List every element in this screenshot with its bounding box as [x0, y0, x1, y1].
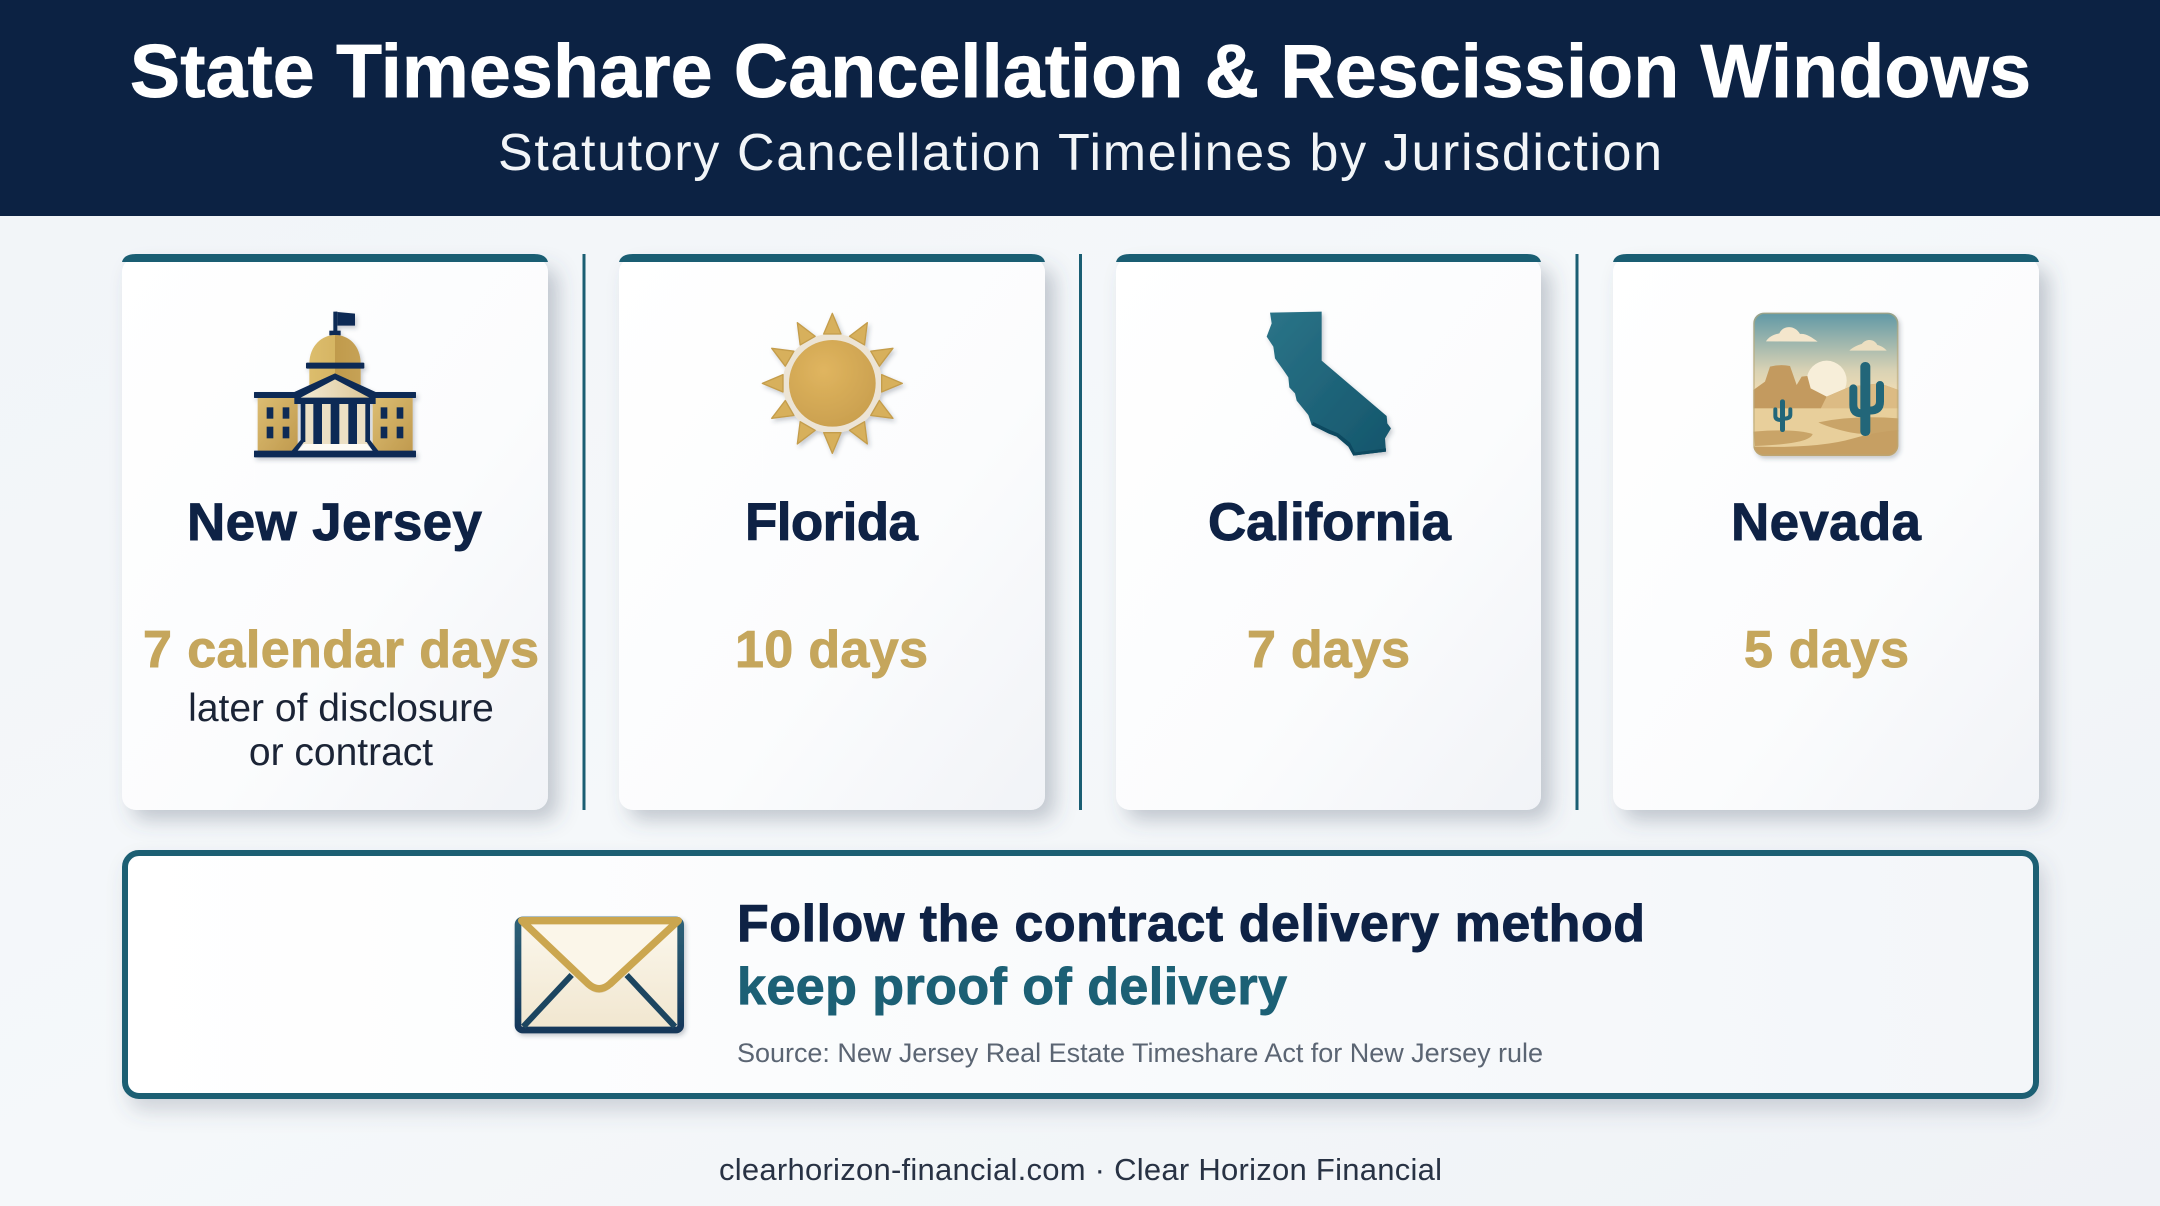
divider	[582, 254, 586, 810]
cancellation window: 7 days	[1247, 621, 1410, 679]
callout heading: Follow the contract delivery method	[737, 895, 1645, 953]
subtitle: Statutory Cancellation Timelines by Jurisdiction	[498, 124, 1662, 182]
callout: delivery reminder	[125, 853, 2036, 1096]
callout emphasis: keep proof of delivery	[737, 958, 1287, 1016]
divider	[1576, 254, 1578, 810]
state name: California	[1208, 493, 1452, 552]
panel: California	[1116, 254, 1541, 810]
state name: Nevada	[1731, 493, 1922, 552]
condition note: or contract	[249, 731, 433, 774]
icon: desert scene	[1753, 313, 1898, 457]
divider	[1079, 254, 1082, 810]
title: State Timeshare Cancellation & Rescission Windows	[130, 29, 2031, 113]
header banner	[0, 0, 2160, 216]
source note: Source: New Jersey Real Estate Timeshare Act for New Jersey rule	[737, 1038, 1543, 1068]
condition note: later of disclosure	[188, 687, 494, 730]
state name: Florida	[745, 493, 919, 552]
cancellation window: 10 days	[735, 621, 928, 679]
icon: California map	[1267, 312, 1391, 456]
icon: envelope	[518, 920, 681, 1030]
cancellation window: 5 days	[1744, 621, 1909, 679]
cancellation window: 7 calendar days	[143, 621, 539, 679]
panel: Florida	[619, 254, 1045, 810]
condition note	[188, 687, 494, 774]
icon: sun	[762, 313, 902, 453]
state name: New Jersey	[187, 493, 483, 552]
icon: capitol building	[254, 312, 416, 457]
panel: New Jersey	[122, 254, 548, 810]
panel: Nevada	[1613, 254, 2039, 810]
footer: clearhorizon-financial.com · Clear Horizon Financial	[719, 1152, 1442, 1187]
